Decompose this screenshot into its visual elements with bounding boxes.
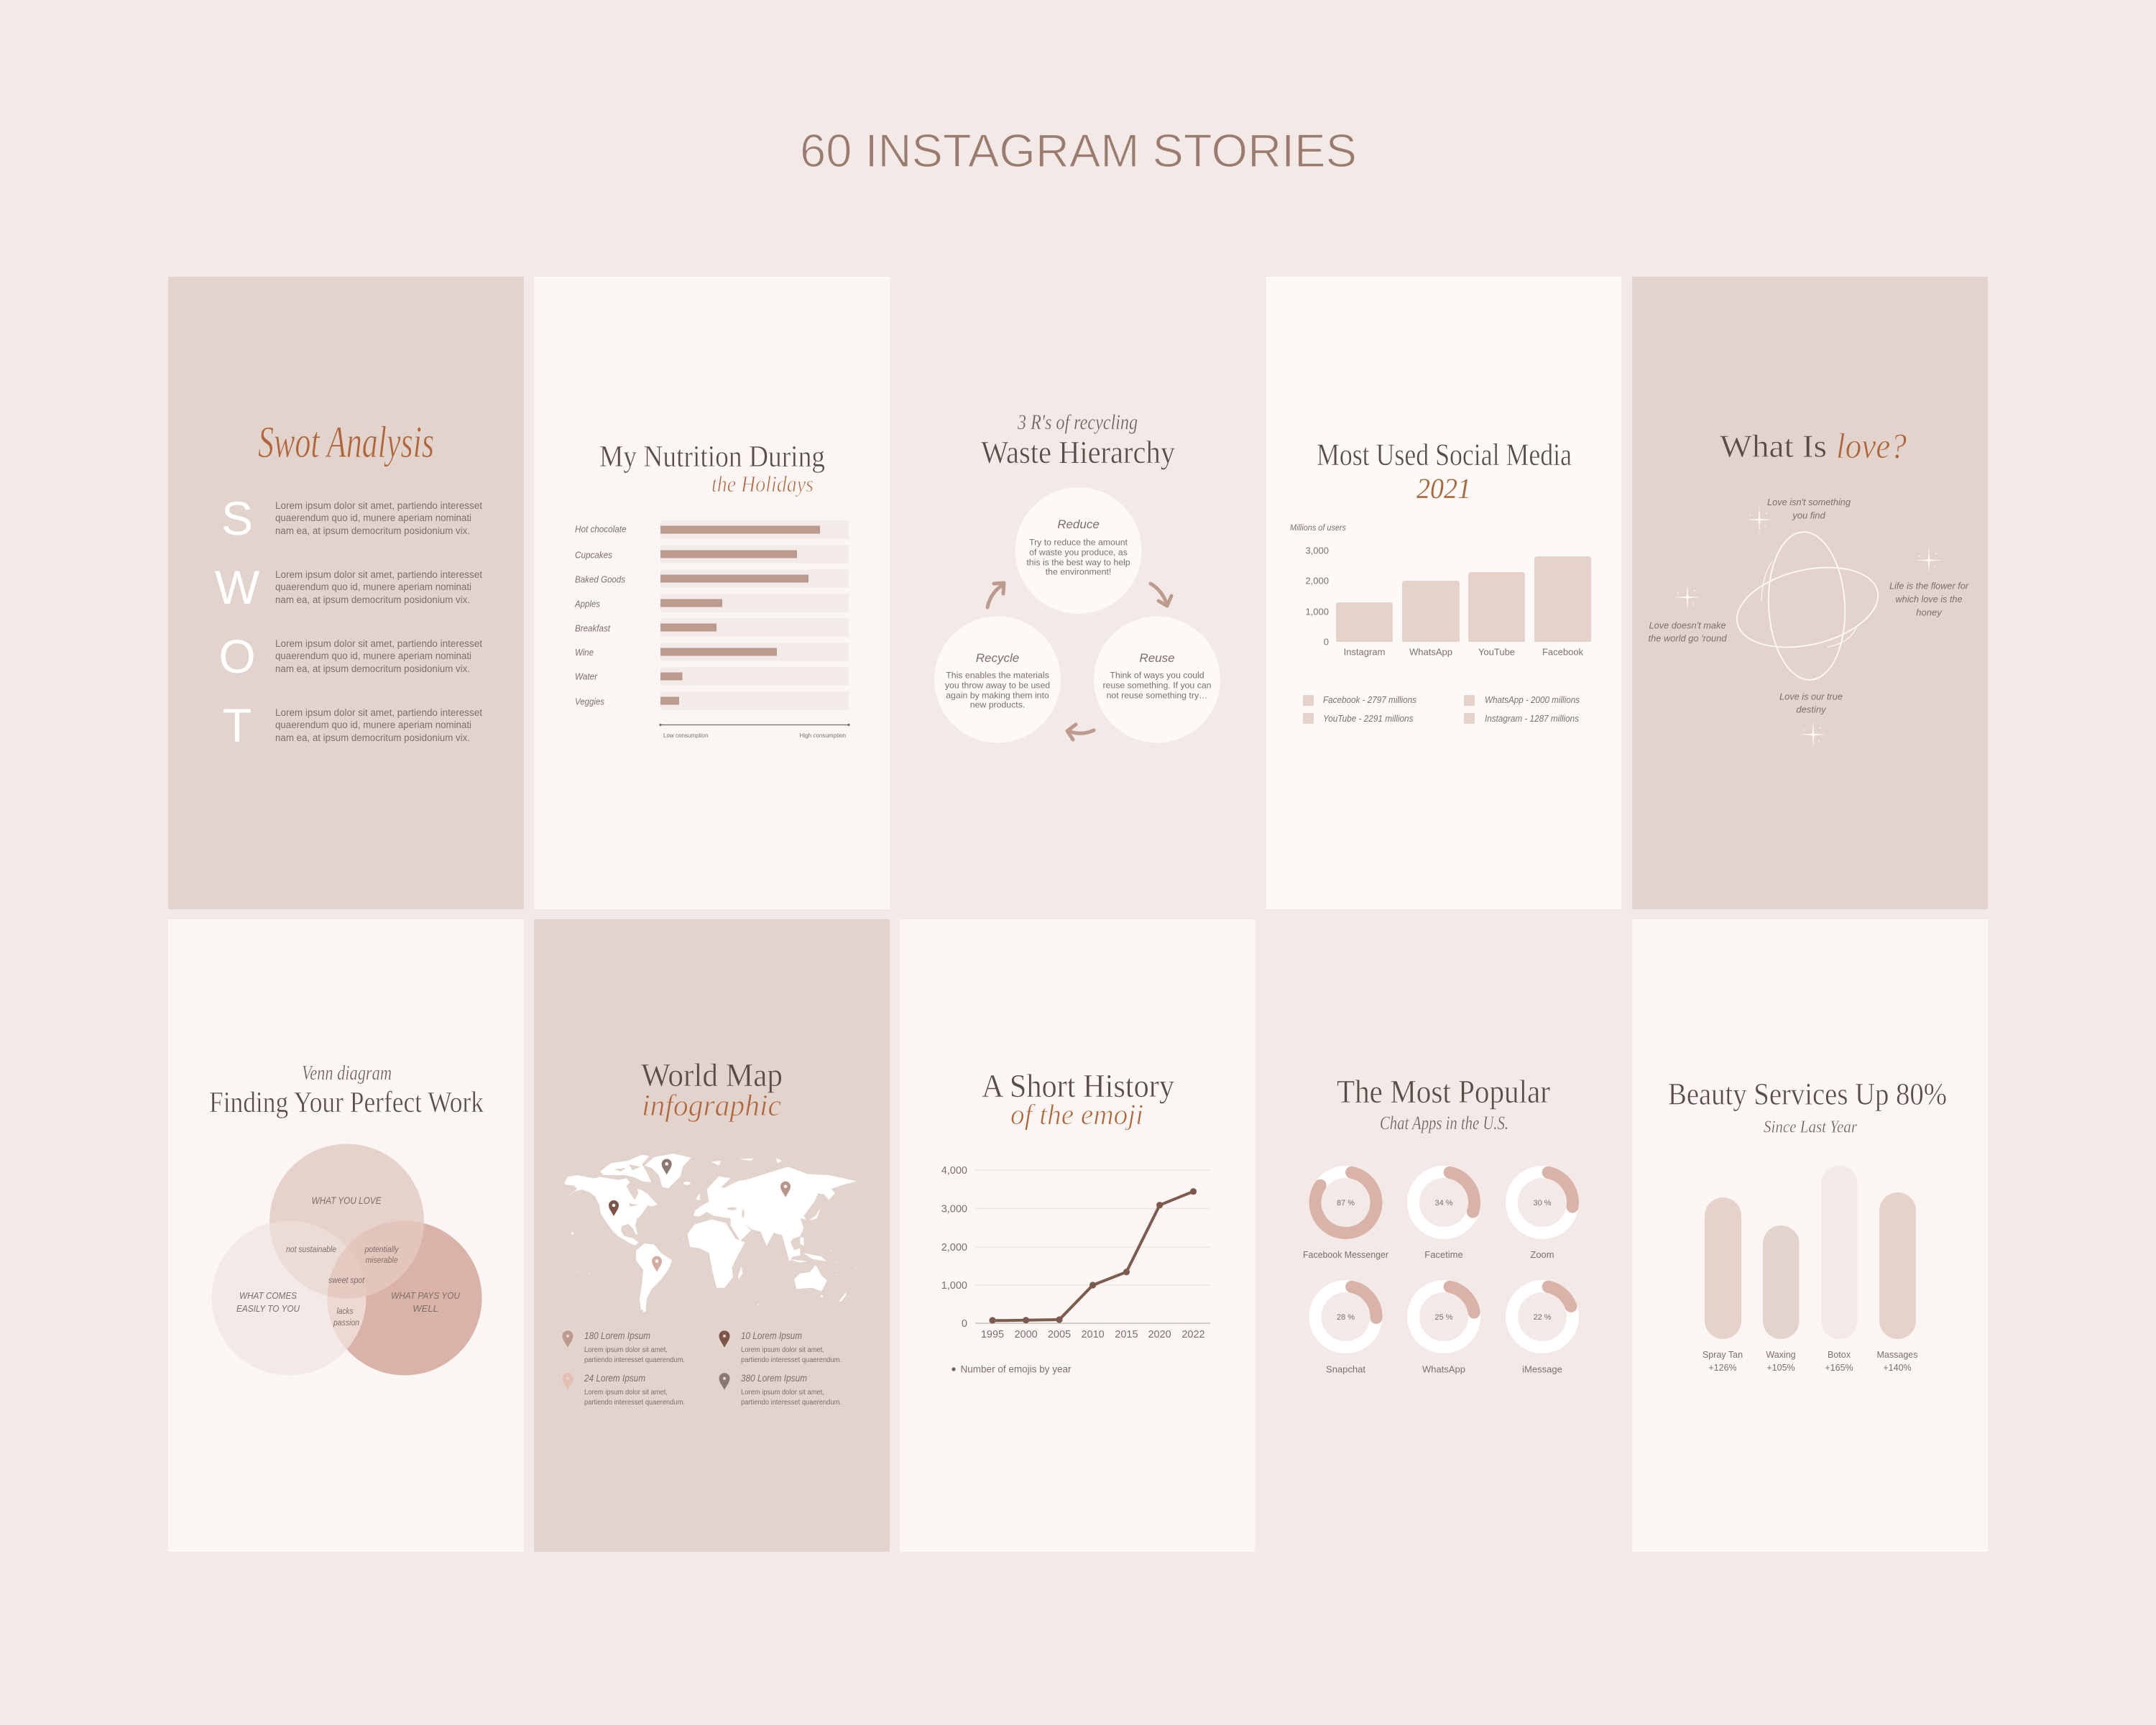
letter T with text: nam ea, at ipsum democritum posidonium vix. (275, 732, 470, 743)
icon: sparkle right (1915, 546, 1943, 574)
circle: Recycle: new products. (970, 700, 1025, 710)
circle: Recycle (934, 617, 1061, 743)
column chart: users: 3,000 (1305, 545, 1329, 556)
heading: What Is love?: love? (1836, 426, 1907, 466)
venn labels (236, 1195, 461, 1328)
bar chart: consumption: Cupcakes (575, 551, 612, 561)
line chart: emojis by year (941, 1165, 1210, 1340)
donut: Snapchat: Snapchat (1326, 1364, 1365, 1374)
legend: social media: Instagram - 1287 millions (1485, 714, 1579, 724)
bar: Waxing: +105% (1766, 1363, 1795, 1373)
donut: Facetime: Facetime (1424, 1249, 1463, 1260)
map: world continents (564, 1154, 857, 1312)
panel: SWOT analysis (168, 277, 524, 909)
bar chart: consumption (574, 520, 849, 710)
quote: love isn't something: you find (1792, 510, 1826, 520)
line chart: emojis by year: 2,000 (941, 1242, 967, 1254)
quote: true destiny: destiny (1796, 704, 1827, 714)
icon: sparkle bottom (1800, 721, 1827, 748)
donut: Facebook Messenger (1303, 1167, 1389, 1260)
line chart: emojis by year: 3,000 (941, 1203, 967, 1215)
letter S with text: S (221, 492, 253, 545)
column chart: users: YouTube (1478, 647, 1515, 657)
circle: Reduce: the environment! (1046, 566, 1111, 576)
circle: Reuse: reuse something. If you can (1102, 680, 1212, 690)
letter S with text: quaerendum quo id, munere aperiam nominati (275, 512, 471, 523)
letter W with text: quaerendum quo id, munere aperiam nominati (275, 581, 471, 592)
bar: Botox: +165% (1825, 1363, 1853, 1373)
bar: Spray Tan (1703, 1197, 1743, 1373)
legend: 24 Lorem Ipsum (563, 1373, 685, 1407)
icon: sparkle left (1674, 584, 1701, 611)
letter T with text: quaerendum quo id, munere aperiam nominati (275, 719, 471, 730)
map pin: North America (609, 1200, 619, 1216)
line chart: emojis by year: 1995 (981, 1329, 1004, 1340)
circle: Reduce: this is the best way to help (1026, 558, 1130, 568)
quote: world go round: the world go 'round (1649, 632, 1727, 644)
quote: flower and honey: honey (1916, 607, 1943, 618)
donut: Snapchat (1310, 1281, 1381, 1374)
subheading: the Holidays: the Holidays (711, 471, 814, 497)
quote: flower and honey: Life is the flower for (1889, 581, 1969, 591)
legend: emojis: Number of emojis by year (960, 1363, 1072, 1374)
letter T with text: Lorem ipsum dolor sit amet, partiendo interesset (275, 707, 482, 718)
subheading: of the emoji: of the emoji (1010, 1098, 1143, 1131)
circle: Recycle: you throw away to be used (945, 680, 1050, 690)
legend: social media: Facebook - 2797 millions (1323, 695, 1416, 705)
line chart: emojis by year: 2020 (1148, 1329, 1171, 1340)
arrow: recycle to reduce (987, 583, 1004, 607)
bar: Massages: +140% (1883, 1363, 1912, 1373)
letter W with text: W (215, 561, 260, 614)
circle: Recycle: again by making them into (946, 690, 1049, 700)
bar: Massages (1877, 1192, 1917, 1373)
letter S with text: nam ea, at ipsum democritum posidonium vix. (275, 525, 470, 536)
legend: social media: WhatsApp - 2000 millions (1485, 695, 1580, 705)
map pin: Russia (780, 1182, 791, 1197)
venn circles (211, 1144, 482, 1376)
bar chart: consumption: Breakfast (575, 624, 610, 634)
bar: Spray Tan: Spray Tan (1703, 1350, 1743, 1360)
panel: beauty services (1632, 919, 1988, 1552)
circle: Reduce: of waste you produce, as (1029, 548, 1128, 558)
donut: Snapchat: 28 % (1337, 1313, 1355, 1322)
legend: social media (1303, 695, 1580, 724)
quote: true destiny (1779, 691, 1843, 714)
bar chart: consumption: Apples (574, 599, 600, 610)
letter T with text (223, 699, 482, 752)
heading: World Map: World Map (641, 1057, 783, 1093)
panel: waste hierarchy (900, 277, 1256, 909)
subheading: infographic: infographic (642, 1090, 781, 1123)
donut: Facetime (1408, 1167, 1480, 1260)
letter O with text: Lorem ipsum dolor sit amet, partiendo interesset (275, 638, 482, 649)
circle: Recycle: This enables the materials (946, 670, 1049, 680)
donut: WhatsApp (1408, 1281, 1480, 1374)
quote: true destiny: Love is our true (1779, 691, 1843, 702)
quote: love isn't something (1767, 497, 1851, 520)
circle: Reuse (1094, 617, 1220, 743)
column chart: users: WhatsApp (1409, 647, 1452, 657)
panel: nutrition (534, 277, 890, 909)
legend: 10 Lorem Ipsum: 10 Lorem Ipsum (741, 1330, 802, 1341)
line chart: emojis by year: 2015 (1115, 1329, 1138, 1340)
line chart: emojis by year: 2022 (1181, 1329, 1205, 1340)
letter O with text: nam ea, at ipsum democritum posidonium vix. (275, 663, 470, 674)
heading: What Is love? (1720, 426, 1907, 466)
venn labels: passion (333, 1317, 359, 1328)
venn labels: sweet spot (328, 1275, 365, 1285)
venn labels: WHAT PAYS YOU (391, 1290, 461, 1301)
heading: Beauty Services Up 80%: Beauty Services Up 80% (1668, 1078, 1947, 1111)
column chart: users: Millions of users (1290, 523, 1346, 533)
panel: world map (534, 919, 890, 1552)
heading: A Short History: A Short History (982, 1067, 1174, 1104)
venn labels: miserable (365, 1255, 398, 1265)
bar chart: consumption: Veggies (575, 697, 604, 707)
heading: Swot Analysis: Swot Analysis (258, 418, 434, 467)
donut: WhatsApp: 25 % (1434, 1313, 1453, 1322)
axis: consumption scale (659, 724, 850, 739)
line chart: emojis by year: 2000 (1014, 1329, 1038, 1340)
legend: 24 Lorem Ipsum: Lorem ipsum dolor sit amet, (584, 1388, 668, 1397)
heading: Waste Hierarchy: Waste Hierarchy (981, 435, 1175, 470)
legend: 10 Lorem Ipsum (719, 1330, 842, 1364)
quote: world go round: Love doesn't make (1649, 620, 1726, 631)
line chart: emojis by year: 2010 (1081, 1329, 1105, 1340)
column chart: users: 1,000 (1305, 607, 1329, 617)
panel: venn diagram (168, 919, 524, 1552)
circle: Reduce: Try to reduce the amount (1029, 538, 1128, 548)
bar: Waxing: Waxing (1766, 1350, 1796, 1360)
letter O with text: O (218, 630, 256, 683)
quote: flower and honey (1889, 581, 1969, 618)
legend: 10 Lorem Ipsum: partiendo interesset quaerendum. (741, 1356, 842, 1364)
legend: 180 Lorem Ipsum: partiendo interesset quaerendum. (584, 1356, 685, 1364)
legend: 380 Lorem Ipsum: 380 Lorem Ipsum (741, 1373, 807, 1384)
arrow: reduce to reuse (1151, 584, 1171, 606)
venn labels: potentially (364, 1244, 399, 1254)
axis: consumption scale: High consumption (799, 732, 846, 739)
circle: Reduce: Reduce (1057, 518, 1100, 531)
heading: My Nutrition During: My Nutrition During (599, 441, 825, 474)
donut: Zoom: 30 % (1533, 1199, 1552, 1208)
bar chart: consumption: Wine (575, 648, 594, 658)
bar chart: consumption: Hot chocolate (575, 525, 627, 535)
illustration: orbit rings (1729, 530, 1886, 682)
subheading: Venn diagram: Venn diagram (302, 1062, 392, 1085)
line chart: emojis by year: 1,000 (941, 1280, 967, 1292)
arrow: reuse to recycle (1067, 724, 1094, 740)
letter O with text: quaerendum quo id, munere aperiam nominati (275, 650, 471, 661)
legend: 24 Lorem Ipsum: partiendo interesset quaerendum. (584, 1398, 685, 1407)
circle: Recycle: Recycle (976, 651, 1019, 665)
heading: Most Used Social Media: Most Used Social Media (1317, 438, 1572, 472)
bar: Massages: Massages (1877, 1350, 1917, 1360)
heading: What Is love?: What Is (1720, 428, 1827, 464)
bar: Waxing (1763, 1225, 1800, 1373)
letter S with text: Lorem ipsum dolor sit amet, partiendo interesset (275, 500, 482, 511)
venn labels: WHAT YOU LOVE (312, 1195, 382, 1206)
icon: sparkle top (1746, 506, 1773, 533)
circle: Reuse: not reuse something try… (1107, 690, 1207, 700)
heading: Finding Your Perfect Work: Finding Your Perfect Work (209, 1085, 484, 1118)
subheading: Since Last Year: Since Last Year (1764, 1118, 1858, 1137)
legend: 380 Lorem Ipsum (719, 1373, 842, 1407)
donut: Zoom: Zoom (1530, 1249, 1554, 1260)
quote: flower and honey: which love is the (1896, 594, 1962, 604)
legend: 180 Lorem Ipsum: 180 Lorem Ipsum (584, 1330, 650, 1341)
donut: Facetime: 34 % (1434, 1199, 1453, 1208)
quote: world go round (1649, 620, 1727, 644)
circle: Reuse: Reuse (1139, 651, 1175, 665)
map pin: Greenland (662, 1159, 672, 1174)
column chart: users (1290, 523, 1591, 657)
letter W with text: nam ea, at ipsum democritum posidonium vix. (275, 594, 470, 605)
line chart: emojis by year: 2005 (1048, 1329, 1071, 1340)
letter T with text: T (223, 699, 252, 752)
legend: 380 Lorem Ipsum: partiendo interesset quaerendum. (741, 1398, 842, 1407)
inland seas (614, 1164, 745, 1218)
subheading: 2021: 2021 (1416, 472, 1471, 505)
letter O with text (218, 630, 482, 683)
column chart: users: Instagram (1344, 647, 1385, 657)
letter S with text (221, 492, 482, 545)
axis: consumption scale: Low consumption (663, 732, 709, 739)
letter W with text: Lorem ipsum dolor sit amet, partiendo interesset (275, 569, 482, 580)
title: 60 INSTAGRAM STORIES (800, 124, 1357, 177)
donut: Zoom (1506, 1167, 1578, 1260)
donut: iMessage (1506, 1281, 1578, 1374)
venn labels: WELL (413, 1303, 438, 1314)
legend: 10 Lorem Ipsum: Lorem ipsum dolor sit amet, (741, 1346, 824, 1354)
legend: social media: YouTube - 2291 millions (1323, 714, 1413, 724)
panel: what is love (1632, 277, 1988, 909)
donut: iMessage: 22 % (1533, 1313, 1552, 1322)
donut: Facebook Messenger: 87 % (1337, 1199, 1355, 1208)
legend: 24 Lorem Ipsum: 24 Lorem Ipsum (584, 1373, 645, 1384)
donut: iMessage: iMessage (1522, 1364, 1562, 1374)
circle: Reduce (1015, 487, 1141, 614)
panel: chat apps (1266, 919, 1621, 1552)
donut: Facebook Messenger: Facebook Messenger (1303, 1249, 1389, 1260)
bar: Botox: Botox (1828, 1350, 1851, 1360)
letter W with text (215, 561, 482, 614)
column chart: users: Facebook (1542, 647, 1584, 657)
panel: social media (1266, 277, 1621, 909)
subheading: Chat Apps in the U.S.: Chat Apps in the U.S. (1380, 1113, 1508, 1133)
map pin: Brazil (652, 1256, 662, 1272)
bar chart: consumption: Baked Goods (575, 575, 625, 585)
venn labels: lacks (336, 1306, 354, 1316)
column chart: users: 0 (1324, 637, 1329, 647)
line chart: emojis by year: 4,000 (941, 1165, 967, 1177)
bar chart: consumption: Water (575, 671, 598, 681)
line chart: emojis by year: 0 (962, 1318, 967, 1330)
subheading: 3 R's of recycling: 3 R's of recycling (1017, 410, 1138, 434)
circle: Reuse: Think of ways you could (1110, 670, 1204, 680)
legend: 380 Lorem Ipsum: Lorem ipsum dolor sit amet, (741, 1388, 824, 1397)
legend: 180 Lorem Ipsum (563, 1330, 685, 1364)
legend: 180 Lorem Ipsum: Lorem ipsum dolor sit amet, (584, 1346, 668, 1354)
quote: love isn't something: Love isn't something (1767, 497, 1851, 507)
venn labels: not sustainable (286, 1244, 336, 1254)
venn labels: WHAT COMES (239, 1290, 297, 1301)
bar: Botox (1821, 1166, 1857, 1373)
heading: The Most Popular: The Most Popular (1337, 1073, 1550, 1110)
donut: WhatsApp: WhatsApp (1422, 1364, 1465, 1374)
venn labels: EASILY TO YOU (236, 1303, 300, 1314)
panel: emoji history (900, 919, 1256, 1552)
column chart: users: 2,000 (1305, 575, 1329, 586)
bar: Spray Tan: +126% (1708, 1363, 1737, 1373)
